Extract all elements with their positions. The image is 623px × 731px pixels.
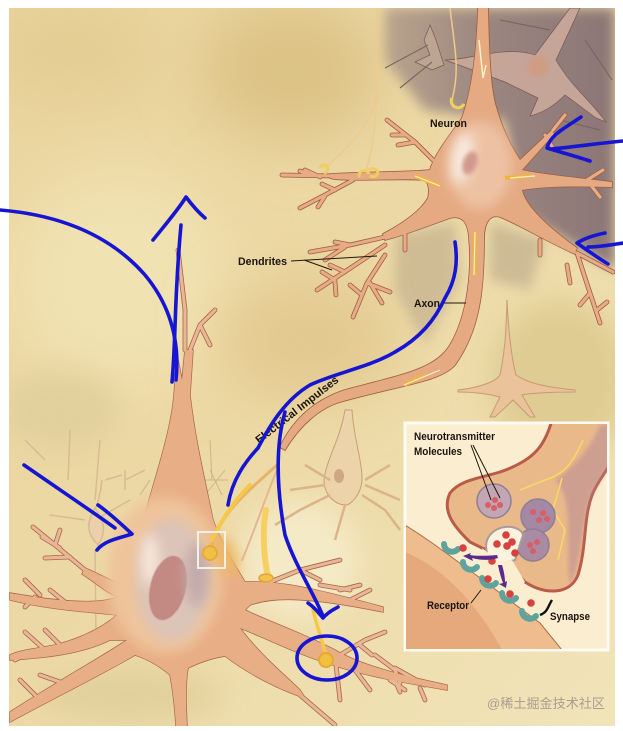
label: Dendrites with leader lines: Dendrites (238, 256, 287, 268)
inset: synapse detail panel (400, 420, 612, 650)
blue ellipse around synapse (297, 636, 357, 680)
dark cell field, upper right (385, 8, 615, 270)
presynaptic terminal (447, 420, 612, 591)
label: Neuron: Neuron (430, 118, 467, 130)
synapses on top neuron (320, 98, 464, 177)
neurotransmitter molecules (459, 531, 535, 607)
highlighted synapse box (198, 532, 225, 568)
open vesicle releasing molecules (486, 527, 523, 565)
purple release arrows (463, 553, 507, 588)
watermark: @稀土掘金技术社区 (487, 696, 605, 711)
inset label: Synapse with bracket: Synapse (550, 611, 590, 623)
faint background neuron, lower right of axon (458, 300, 575, 417)
dark cell field, below soma (395, 222, 460, 345)
label: Axon with leader line (414, 298, 466, 310)
hand-drawn blue annotations (0, 117, 623, 680)
blue arrow, lower right (577, 233, 623, 264)
blue arrow, upper right (547, 117, 623, 161)
blue line along axon to terminal (228, 242, 456, 505)
postsynaptic inner band (400, 550, 502, 650)
blue line to lower synapse (278, 412, 338, 618)
vesicle contents (485, 497, 550, 554)
inset label: Neurotransmitter Molecules: Neurotransmitter (414, 431, 496, 443)
inset label: Receptor (427, 590, 481, 612)
fine fibres from upper edge (325, 8, 456, 172)
gap (482, 548, 525, 583)
receptors (444, 544, 536, 619)
inset label: Synapse with bracket (540, 600, 590, 623)
faint background neurons, left (25, 430, 228, 640)
label: Dendrites with leader lines (238, 256, 377, 270)
postsynaptic membrane (400, 522, 562, 650)
bottom neuron (10, 250, 447, 726)
label: Axon with leader line: Axon (414, 298, 440, 310)
label: Electrical Impulses: Electrical Impulses (253, 374, 341, 446)
yellow impulse inside terminal (520, 440, 583, 560)
inset label: Neurotransmitter Molecules (414, 431, 500, 500)
blue arrow into soma (24, 465, 132, 550)
upper background neuron (385, 8, 612, 130)
blue arrow up (153, 197, 205, 382)
inset label: Receptor: Receptor (427, 600, 470, 612)
vesicles (477, 484, 555, 561)
hatched shadow right of axon (490, 222, 545, 290)
faint background neuron, centre bottom (275, 410, 400, 540)
terminal shading (556, 424, 607, 583)
axon terminals, yellow (203, 465, 333, 667)
inset label: Neurotransmitter Molecules: Molecules (414, 446, 462, 458)
top neuron (280, 8, 613, 450)
blue curve from left edge (0, 210, 177, 380)
